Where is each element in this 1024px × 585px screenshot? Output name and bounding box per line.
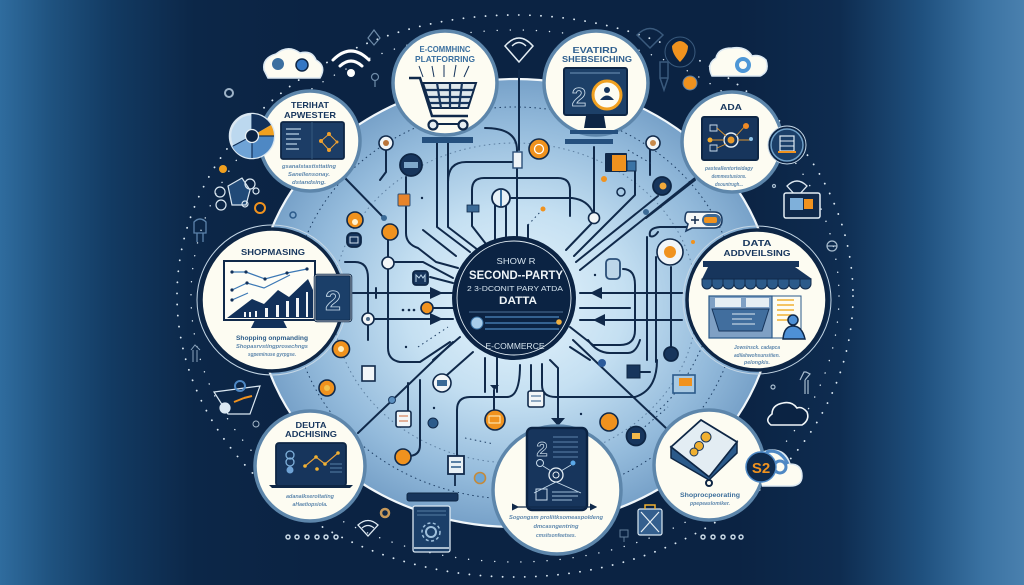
floating icons top and left (191, 28, 837, 552)
panel: laptop circle (255, 411, 365, 521)
panel: book circle (654, 410, 764, 520)
icon: round lamp (683, 76, 697, 90)
icon: bag (638, 505, 662, 535)
panel: shopping chart circle: Shopasrvstingprosechngs (236, 344, 308, 350)
central disc (257, 79, 773, 527)
icon: store front (702, 261, 812, 339)
icon: wifi triangle (505, 38, 533, 62)
description: gsanalstastisttating (281, 164, 337, 170)
connector network (345, 70, 720, 458)
label: E-COMMERCE (486, 342, 544, 351)
icon: document badge (768, 126, 806, 164)
panel: ADA circle (682, 92, 782, 192)
icon: gear cloud badge (746, 450, 802, 486)
arrow (518, 506, 596, 508)
panel: tablet circle: dmcasngentring (534, 524, 579, 530)
description: Shopping onpmanding (236, 335, 308, 342)
icon: small circles right (771, 184, 837, 394)
icon: wifi bottom (358, 520, 378, 536)
heading: DATA (742, 238, 772, 248)
icon: shopping cart (409, 65, 476, 130)
icon: faded wifi and plug (637, 28, 668, 90)
panel: tablet circle (493, 426, 621, 554)
description: Sogongsm proliitksomeaspoldeng (509, 515, 604, 521)
panel: top-left circle (260, 91, 360, 191)
heading: SHOPMASING (241, 247, 305, 257)
icon: pie chart (230, 114, 274, 158)
description: pasteallentorteidagy (704, 166, 754, 172)
central hub: 2 3-DCONIT PARY ATDA (467, 284, 563, 293)
icon: nodes bottom (388, 359, 646, 486)
icon: network cluster (215, 178, 259, 210)
panel: shopping chart circle (197, 225, 351, 375)
screen (281, 122, 344, 159)
icon: basket (214, 381, 260, 414)
icon: plug (620, 530, 628, 542)
icon: cloud with gears (264, 49, 323, 78)
panel: ADA circle: demmestusions. (712, 174, 747, 180)
central hub (452, 236, 576, 360)
dotted outer rings (177, 15, 853, 577)
heading: SHOW R (496, 257, 536, 266)
icon: house arrow (191, 345, 200, 362)
panel: laptop circle: ADCHISING (285, 429, 337, 439)
description: Jowsinsck. cadapca (734, 345, 780, 351)
icon: orange dots (219, 89, 296, 218)
panel: laptop circle: aHaetiopsiola. (292, 502, 328, 508)
base bar (422, 137, 473, 143)
panel: top-left circle: APWESTER (284, 110, 336, 120)
icon: dots row bottom right (701, 535, 743, 539)
panel: book circle: ppepeaslomiker. (689, 501, 730, 507)
icon: status bar (407, 493, 458, 501)
panel: top-left circle: Sanellensonay. (288, 172, 330, 178)
panel: third-party circle (544, 31, 648, 144)
base bars (570, 130, 618, 134)
number tablet: 2 (325, 285, 341, 316)
panel: shopping chart circle: sgpeminuse gyrpgse. (248, 352, 296, 358)
icon: gear tablet (413, 506, 450, 552)
icon: laptop (269, 443, 353, 488)
panel: store circle (683, 226, 831, 374)
small node icons (319, 136, 722, 486)
heading: DEUTA (296, 420, 326, 430)
panel: e-commerce platform circle (393, 31, 497, 143)
panel: top-left circle: dstandsing. (292, 180, 327, 186)
icon: pin bank (194, 219, 206, 242)
icon: wifi left (333, 51, 369, 77)
panel: store circle: pelongkis. (743, 360, 770, 366)
right arrows (580, 292, 683, 294)
panel: ADA circle: dsountrugh... (715, 182, 743, 188)
screen (702, 117, 758, 160)
panel: e-commerce platform circle: PLATFORRING (415, 54, 475, 64)
icon: speech bubble (685, 212, 722, 231)
number tablet (315, 275, 351, 321)
icon: book (671, 420, 737, 486)
data bars (469, 312, 563, 329)
icon: nodes upper left (319, 136, 433, 396)
icon: nodes top center (381, 136, 671, 279)
monitor: 2 (572, 82, 586, 112)
icon: wifi box (784, 181, 820, 218)
left arrows (353, 292, 453, 294)
panel: third-party circle: SHEBSEICHING (562, 54, 632, 64)
icon: orange pin (665, 37, 695, 67)
description: Shoprocpeorating (680, 492, 740, 499)
panel: store circle: adilahwohsunsitien. (734, 353, 780, 359)
tablet: 2 (536, 439, 548, 461)
icon: dots row bottom left (286, 535, 338, 539)
heading: TERIHAT (291, 100, 330, 110)
icon: cloud right (768, 403, 808, 425)
panel: tablet circle: cmsitsonfeetses. (536, 533, 576, 539)
heading: ADA (720, 102, 742, 112)
icon: node right (657, 239, 695, 393)
heading: EVATIRD (572, 45, 618, 55)
central hub: SECOND--PARTY (469, 268, 563, 282)
line and area chart (224, 261, 315, 328)
icon: gear cloud badge: S2 (752, 460, 770, 477)
lower lines (358, 342, 453, 433)
icon: cloud with gear (710, 48, 767, 76)
icon: orange ring bottom (381, 509, 389, 517)
description: adanalkseroltating (286, 494, 335, 500)
icon: sparkle and pin (368, 30, 380, 87)
central hub: DATTA (499, 295, 537, 307)
heading: E-COMMHINC (420, 44, 470, 54)
panel: store circle: ADDVEILSING (724, 248, 791, 258)
